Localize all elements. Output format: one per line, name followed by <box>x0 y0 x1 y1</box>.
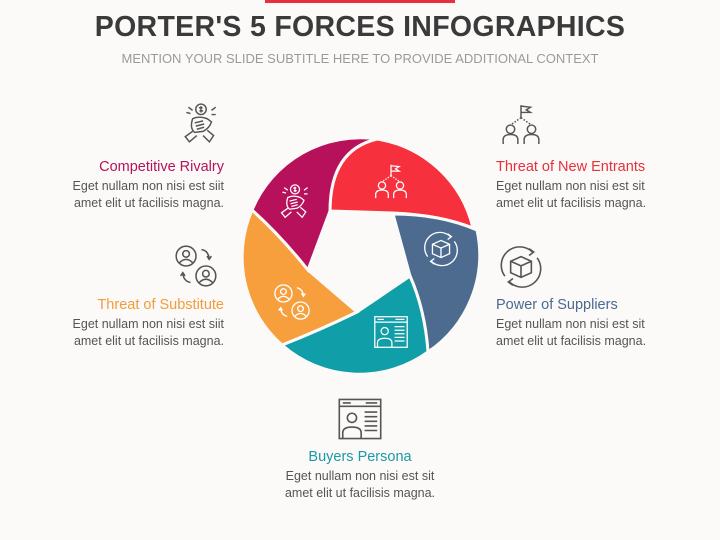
icon: substitute <box>176 246 216 286</box>
text: competitive rivalry: amet elit ut facilisis magna. <box>74 196 224 210</box>
text: threat of substitute <box>73 297 224 348</box>
text: power of suppliers: amet elit ut facilisis magna. <box>496 334 646 348</box>
segment: buyers persona <box>282 276 428 374</box>
segment: threat of new entrants <box>330 139 473 228</box>
title: PORTER'S 5 FORCES INFOGRAPHICS <box>95 11 625 43</box>
subtitle: MENTION YOUR SLIDE SUBTITLE HERE TO PROVIDE ADDITIONAL CONTEXT <box>122 51 598 66</box>
text: buyers persona <box>285 449 435 500</box>
accent bar <box>265 0 455 3</box>
icon: flag people white <box>376 165 406 198</box>
text: threat of substitute: Threat of Substitute <box>97 297 224 313</box>
text: power of suppliers: Eget nullam non nisi est sit <box>496 317 645 331</box>
text: threat of substitute: amet elit ut facilisis magna. <box>74 334 224 348</box>
text: threat of new entrants: Eget nullam non nisi est sit <box>496 179 645 193</box>
text: buyers persona: Eget nullam non nisi est sit <box>286 469 434 483</box>
text: competitive rivalry <box>73 159 224 210</box>
icon: box <box>501 247 541 287</box>
icon: persona white <box>375 317 407 347</box>
text: competitive rivalry: Eget nullam non nisi est siit <box>73 179 224 193</box>
text: competitive rivalry: Competitive Rivalry <box>99 159 224 175</box>
text: threat of new entrants: amet elit ut facilisis magna. <box>496 196 646 210</box>
icon: box white <box>425 232 457 266</box>
text: power of suppliers: Power of Suppliers <box>496 297 618 313</box>
icon: handshake white <box>282 185 308 217</box>
text: buyers persona: Buyers Persona <box>308 449 412 465</box>
text: threat of new entrants: Threat of New Entrants <box>496 159 645 175</box>
text: buyers persona: amet elit ut facilisis magna. <box>285 486 435 500</box>
text: threat of substitute: Eget nullam non nisi est siit <box>73 317 224 331</box>
icon: persona <box>339 399 381 439</box>
icon: handshake <box>185 104 216 142</box>
segment: competitive rivalry <box>252 138 377 270</box>
icon: substitute white <box>275 285 309 319</box>
icon: flag people <box>503 105 539 144</box>
text: power of suppliers <box>496 297 646 348</box>
segment: threat of substitute <box>242 210 357 345</box>
text: threat of new entrants <box>496 159 646 210</box>
segment: power of suppliers <box>393 214 480 352</box>
